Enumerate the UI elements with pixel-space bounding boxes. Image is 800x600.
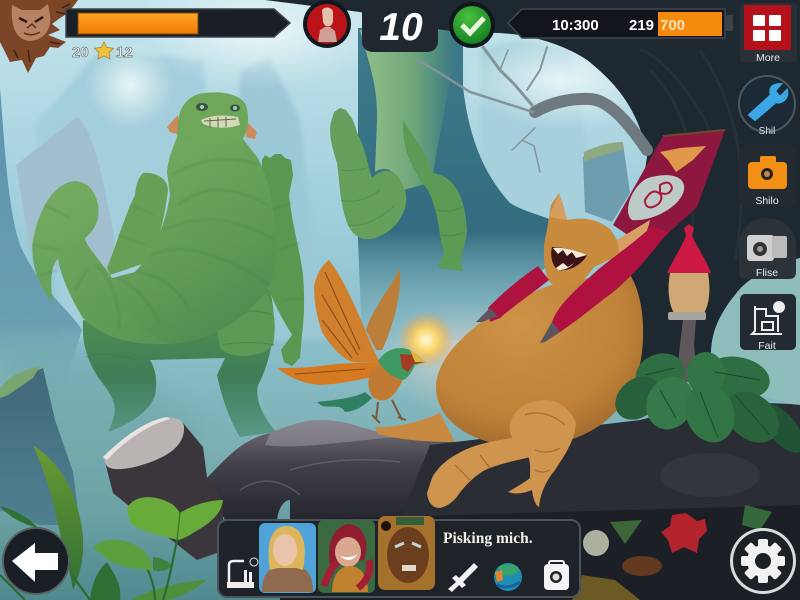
bird near wing [314, 260, 380, 362]
bottom action bar [218, 516, 580, 597]
red scarf right [552, 226, 668, 332]
giant legs [83, 283, 276, 437]
more button [740, 3, 797, 64]
settings gear button [730, 528, 796, 594]
ground plants and pebbles [572, 505, 772, 600]
back arrow button [3, 528, 69, 594]
distant green giant [330, 30, 467, 271]
bird body [368, 362, 405, 401]
red character medallion [303, 0, 351, 48]
player stats: 12 [116, 44, 133, 61]
left foreground leaves [0, 445, 223, 600]
resource bar: 219 [629, 17, 654, 34]
icon: building [227, 558, 258, 588]
bird tail wing [277, 362, 380, 385]
bare tree branch [417, 47, 647, 172]
resource bar: 700 [660, 17, 685, 34]
big green giant [32, 92, 304, 437]
bird tail and legs [317, 392, 372, 412]
creature belly [436, 272, 643, 447]
broken stump [105, 417, 225, 560]
center counter: 10 [379, 6, 423, 49]
giant head [167, 92, 257, 144]
creature open mouth [551, 247, 587, 270]
portrait card: masked warrior [378, 516, 435, 590]
resource bar: 10:300 [552, 17, 599, 34]
left mossy stump [0, 366, 80, 525]
fait button [740, 294, 796, 352]
dark tree canopy and trunk [265, 0, 800, 405]
wrench button [739, 76, 795, 137]
center counter [362, 0, 438, 52]
wrench button: Shil [759, 126, 775, 137]
icon: camera [544, 561, 569, 590]
green check button [449, 2, 495, 48]
bird far wing [366, 268, 400, 350]
red scarf left [488, 266, 549, 322]
giant scale folds [33, 159, 304, 330]
more button: More [756, 52, 780, 64]
icon: sword [448, 563, 478, 592]
portrait card: red haired woman [318, 520, 375, 593]
giant body and tail [32, 137, 277, 344]
creature tail [375, 413, 455, 442]
player stats [72, 42, 133, 61]
files button: Flise [756, 267, 778, 279]
fait button: Fait [758, 340, 776, 352]
icon: star [94, 42, 114, 59]
creature legs [427, 437, 530, 508]
tall leaf [33, 445, 83, 590]
heart leaf [127, 497, 223, 540]
caption text: Pisking mich. [443, 530, 533, 547]
creature head [544, 193, 650, 288]
creature claws [476, 308, 560, 343]
red banner [613, 130, 725, 250]
giant left arm [107, 173, 168, 275]
camera shop button: Shilo [755, 195, 779, 207]
lantern on stand [667, 224, 711, 382]
giant right arm [262, 154, 304, 366]
top left avatar owl [0, 0, 78, 73]
resource bar [508, 9, 733, 38]
bird glow [398, 312, 454, 368]
camera shop button [739, 147, 796, 207]
fallen log and rock [103, 403, 800, 600]
bird head [378, 348, 425, 380]
bird with glowing beak [277, 260, 454, 423]
green leaves cluster [607, 347, 800, 460]
files button [739, 218, 796, 279]
icon: globe [494, 563, 522, 591]
health bar [66, 9, 290, 37]
portrait card: blonde woman [259, 523, 316, 593]
player stats: 20 [72, 44, 89, 61]
orange creature [375, 193, 668, 508]
distant blue tree silhouette [358, 28, 552, 340]
